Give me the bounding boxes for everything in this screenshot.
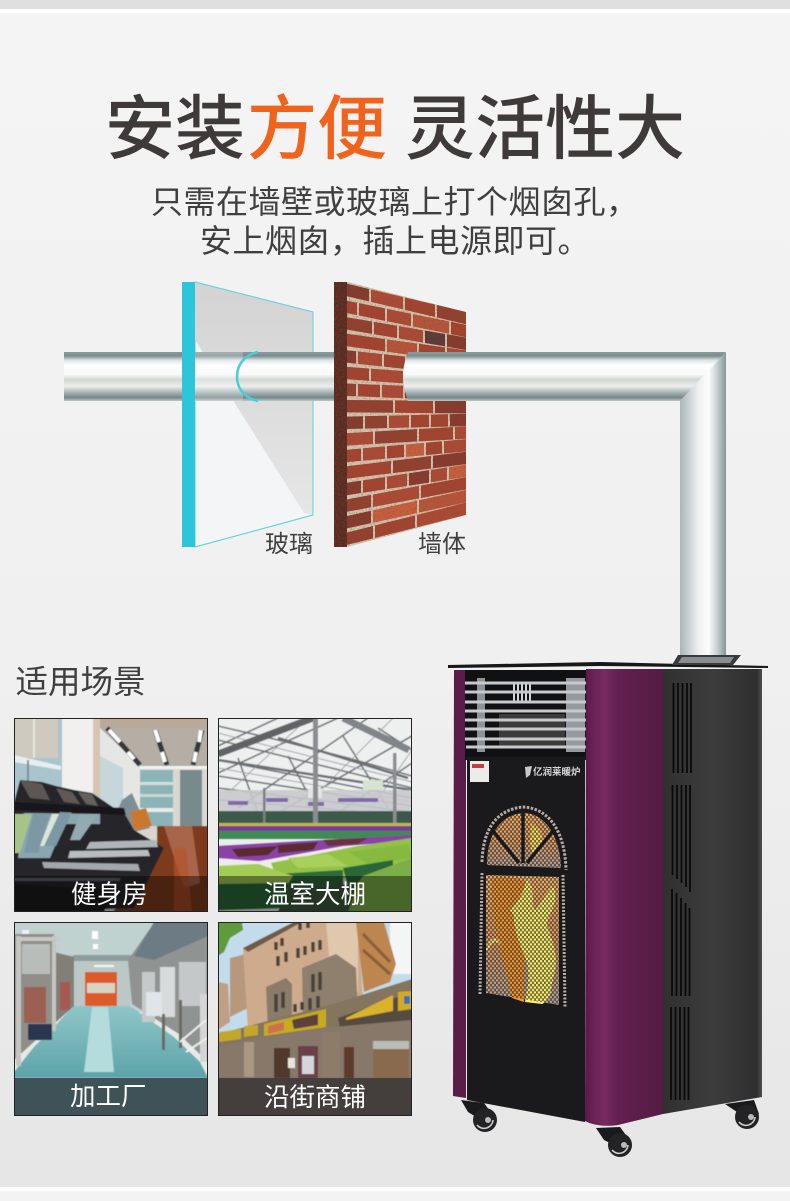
glass panel — [195, 282, 313, 547]
photo tile: greenhouse: 温室大棚 — [264, 881, 366, 909]
stove flame window — [480, 807, 566, 1008]
stove brand logo: 亿润莱暖炉 — [533, 766, 581, 778]
photo tile: greenhouse — [218, 718, 412, 912]
stove control panel — [672, 655, 741, 665]
label: glass: 玻璃 — [265, 531, 313, 558]
stove casters — [461, 1100, 759, 1157]
subtitle text — [151, 184, 639, 259]
stove left purple strip — [453, 670, 466, 1098]
heading: applicable scenes: 适用场景 — [16, 664, 146, 700]
photo tile: gym: 健身房 — [71, 881, 148, 909]
subtitle text: 只需在墙壁或玻璃上打个烟囱孔， — [151, 184, 639, 220]
photo tile: street shops — [218, 922, 412, 1116]
stove red certification label — [470, 761, 489, 782]
stove front upper louvre — [465, 670, 587, 760]
stove right side panel — [663, 669, 762, 1114]
photo tile: street shops: 沿街商铺 — [264, 1084, 366, 1112]
title — [105, 90, 685, 168]
stove front black panel — [467, 757, 585, 1122]
title: 方便 — [247, 90, 387, 168]
chimney pipe — [64, 352, 726, 660]
label: wall: 墙体 — [418, 531, 466, 558]
photo tile: factory: 加工厂 — [70, 1083, 147, 1111]
stove side vents — [671, 683, 691, 1100]
photo tile: gym — [14, 718, 208, 912]
product: pellet stove — [448, 655, 768, 1157]
subtitle text: 安上烟囱，插上电源即可。 — [200, 223, 590, 259]
title: 灵活性大 — [405, 90, 685, 168]
title: 安装 — [105, 90, 245, 168]
stove top plate — [448, 662, 768, 668]
photo tile: factory — [14, 922, 208, 1116]
brick wall — [334, 282, 466, 547]
stove purple corner panel — [585, 669, 663, 1126]
glass edge — [182, 282, 195, 547]
